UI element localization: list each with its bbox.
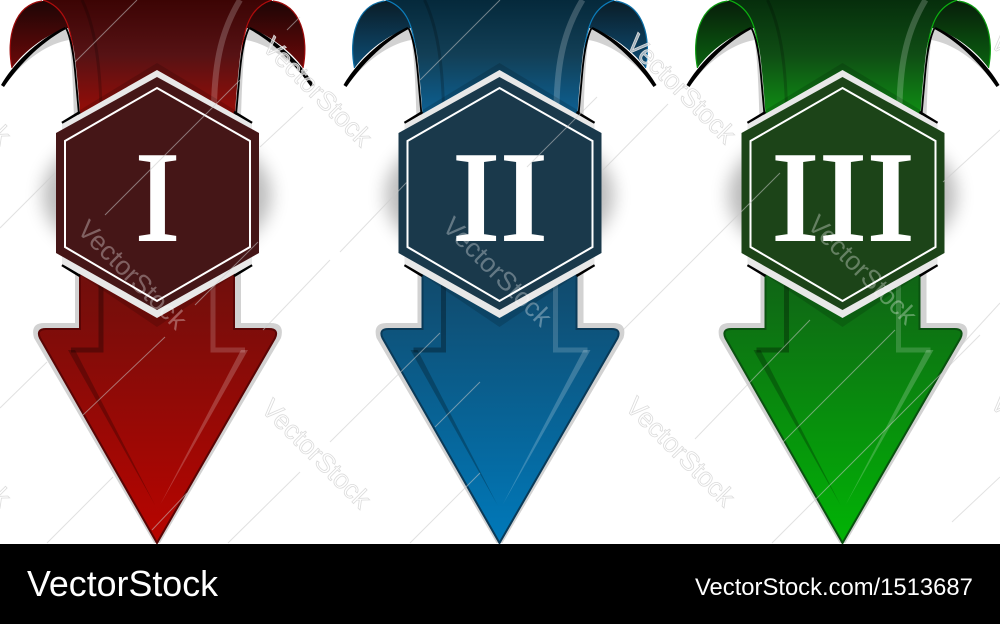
ribbon black edges xyxy=(752,28,934,115)
watermarks xyxy=(0,27,1000,515)
numeral III: III xyxy=(771,127,915,268)
arrow inner dark line xyxy=(414,276,444,350)
arrow inner dark line xyxy=(756,276,786,350)
short black lines xyxy=(404,112,594,276)
curl black edges xyxy=(344,27,656,87)
arrow shadow xyxy=(376,270,624,543)
right curl xyxy=(920,0,990,68)
watermarks: VectorStock xyxy=(620,391,741,513)
arrow 1: red xyxy=(1,0,314,543)
left curl xyxy=(10,0,80,68)
arrow inner light diagonal xyxy=(846,350,934,505)
ribbon light fold xyxy=(900,0,926,105)
ribbon dark fold xyxy=(82,0,101,110)
ribbon black edges xyxy=(408,28,592,115)
ribbon xyxy=(386,0,614,140)
arrow inner dark diagonal xyxy=(754,350,840,505)
hexagon glow xyxy=(43,123,271,267)
ribbon light fold xyxy=(556,0,582,105)
arrow inner dark diagonal xyxy=(410,350,498,505)
curl black edges xyxy=(1,27,314,87)
hexagon xyxy=(56,77,259,310)
hexagon inner line xyxy=(750,88,936,301)
watermarks: VectorStock xyxy=(72,214,193,336)
arrow inner dark diagonal xyxy=(68,350,155,505)
watermarks: VectorStock xyxy=(437,211,558,333)
hexagon inner line xyxy=(65,88,250,301)
arrow shadow xyxy=(33,270,282,543)
arrow inner light diagonal xyxy=(502,350,590,505)
ribbon bright rims xyxy=(386,0,614,100)
right curl shadow xyxy=(230,27,311,118)
watermarks: VectorStock xyxy=(256,393,377,515)
arrow inner light line xyxy=(898,276,930,350)
hexagon white band xyxy=(748,70,938,318)
footer brand: VectorStock xyxy=(27,564,218,604)
hexagon shadow on ribbon xyxy=(80,63,235,130)
hexagon shadow below xyxy=(766,275,920,327)
hexagon xyxy=(742,77,944,310)
hexagon inner line xyxy=(408,88,592,301)
arrow body xyxy=(381,270,619,543)
right curl shadow xyxy=(916,27,996,118)
left curl xyxy=(696,0,766,68)
arrow inner light diagonal xyxy=(160,350,248,505)
hexagon glow xyxy=(386,123,614,267)
left curl xyxy=(353,0,422,68)
watermarks: VectorStock xyxy=(257,31,378,153)
footer bar xyxy=(0,544,1000,624)
ribbon black edges xyxy=(66,28,249,115)
left curl shadow xyxy=(4,27,85,118)
ribbon dark fold xyxy=(768,0,786,110)
ribbon light fold xyxy=(214,0,240,105)
short black lines xyxy=(748,112,938,276)
curl rims xyxy=(10,1,305,68)
right curl shadow xyxy=(572,27,654,118)
arrow 3: green xyxy=(686,0,1000,543)
arrow inner light line xyxy=(556,276,588,350)
hexagon glow xyxy=(728,123,956,267)
ribbon bright rims xyxy=(43,0,272,100)
left curl shadow xyxy=(690,27,770,118)
numeral II: II xyxy=(452,127,548,268)
arrow inner dark line xyxy=(71,276,101,350)
ribbon xyxy=(43,0,272,140)
hexagon shadow on ribbon xyxy=(766,63,920,130)
ribbon bright rims xyxy=(728,0,958,100)
watermarks: VectorStock xyxy=(802,209,923,331)
arrow body xyxy=(724,270,962,543)
left curl shadow xyxy=(346,27,428,118)
hexagon white band xyxy=(404,70,594,318)
curl rims xyxy=(353,1,647,68)
arrow body xyxy=(39,270,276,543)
short black lines xyxy=(62,112,252,276)
arrow shadow xyxy=(719,270,967,543)
hexagon shadow on ribbon xyxy=(422,63,578,130)
right curl xyxy=(578,0,647,68)
arrow inner light line xyxy=(213,276,245,350)
hexagon shadow below xyxy=(80,275,234,327)
watermarks: VectorStock xyxy=(621,28,742,150)
hexagon shadow below xyxy=(422,275,576,327)
curl black edges xyxy=(686,27,1000,87)
hexagon white band xyxy=(62,70,252,318)
curl rims xyxy=(696,1,990,68)
ribbon xyxy=(728,0,958,140)
hexagon xyxy=(398,77,602,310)
ribbon dark fold xyxy=(424,0,444,110)
numeral I: I xyxy=(135,127,180,268)
arrow 2: blue xyxy=(344,0,656,543)
footer url: VectorStock.com/1513687 xyxy=(695,574,973,601)
right curl xyxy=(235,0,305,68)
